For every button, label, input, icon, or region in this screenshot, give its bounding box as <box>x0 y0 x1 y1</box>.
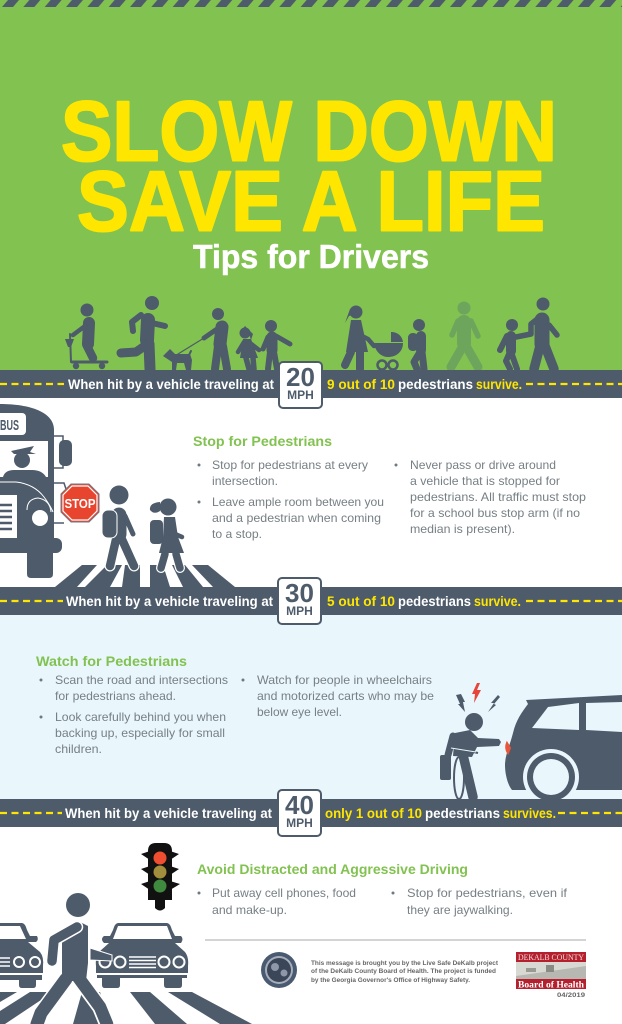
figure: dog walker with dog <box>163 308 227 370</box>
figure: woman with stroller <box>345 306 403 370</box>
logo: county seal <box>261 952 297 988</box>
left bullets: Stop for pedestrians at every <box>212 458 368 472</box>
icon: right car <box>96 923 188 988</box>
road band: 30 mph: survive. <box>474 594 521 609</box>
right bullets: Stop for pedestrians, even if <box>407 886 568 900</box>
heading: Watch for Pedestrians <box>36 653 187 669</box>
icon: alert bolts <box>456 683 500 712</box>
grille <box>0 495 17 538</box>
sponsor text: of the DeKalb County Board of Health. The project is funded <box>311 968 496 975</box>
speed sign 20: MPH <box>287 388 314 402</box>
right bullets: pedestrians. All traffic must stop <box>410 490 586 504</box>
icon: girl with backpack <box>150 498 184 568</box>
right bullets <box>392 886 568 917</box>
figure: boy <box>263 320 290 369</box>
left bullets: for pedestrians ahead. <box>55 689 176 703</box>
left bullets: Scan the road and intersections <box>55 673 228 687</box>
cyclist <box>440 713 501 799</box>
left bullets <box>198 886 356 917</box>
right bullets: for a school bus stop arm (if no <box>410 506 580 520</box>
left bullets: to a stop. <box>212 527 262 541</box>
panel: stop for pedestrians <box>193 433 586 541</box>
title: SLOW DOWN <box>61 84 557 180</box>
icon: left car <box>0 923 43 988</box>
road band: 40 mph: survives. <box>503 806 556 821</box>
left bullets: Put away cell phones, food <box>212 886 356 900</box>
figure: child with backpack <box>408 319 425 369</box>
right bullets <box>394 458 586 536</box>
hood curve <box>0 482 53 512</box>
road band: 40 mph: When hit by a vehicle traveling at <box>65 806 272 821</box>
road band: 20 mph: pedestrians <box>398 377 473 392</box>
speed sign 40 <box>278 790 321 836</box>
figure: adult holding child's hand <box>500 298 557 369</box>
road band: 20 mph: When hit by a vehicle traveling at <box>68 377 274 392</box>
speed sign 40: MPH <box>286 816 313 830</box>
panel: watch for pedestrians <box>0 615 622 805</box>
right bullets: Never pass or drive around <box>410 458 556 472</box>
road band: 40 mph: only 1 out of 10 <box>325 806 422 821</box>
logo: board of health: DEKALB COUNTY <box>518 953 584 962</box>
icon: school bus with stop arm <box>0 404 99 578</box>
right bullets: they are jaywalking. <box>407 903 513 917</box>
heading: Avoid Distracted and Aggressive Driving <box>197 861 468 877</box>
speed sign 30 <box>278 578 321 624</box>
icon: boy with backpack <box>102 486 134 566</box>
road band: 20 mph: survive. <box>476 377 522 392</box>
road band: 30 mph: pedestrians <box>398 594 471 609</box>
right bullets <box>242 673 434 719</box>
icon: crosswalk under children <box>55 565 235 587</box>
left bullets <box>198 458 384 541</box>
hazard stripe <box>0 0 622 7</box>
road band: 20 mph <box>0 362 622 408</box>
logo: board of health <box>516 952 586 990</box>
figure: scooter rider <box>65 304 107 369</box>
sponsor text <box>311 960 499 984</box>
figure: faded walker <box>451 302 478 367</box>
right bullets: median is present). <box>410 522 515 536</box>
left bullets: backing up, especially for small <box>55 726 225 740</box>
figure: girl <box>238 326 259 369</box>
date: 04/2019 <box>557 992 585 999</box>
icon: school bus with stop arm: BUS <box>0 417 19 434</box>
sponsor text: This message is brought you by the Live Safe DeKalb project <box>311 960 499 967</box>
road band: 30 mph <box>0 587 622 615</box>
title <box>61 84 557 250</box>
subtitle: Tips for Drivers <box>193 238 429 275</box>
icon: pedestrian on phone <box>37 893 112 1024</box>
speed sign 20 <box>279 362 322 408</box>
heading: Stop for Pedestrians <box>193 433 332 449</box>
icon: crosswalk bottom <box>0 992 252 1024</box>
left bullets: Leave ample room between you <box>212 495 384 509</box>
left bullets: Look carefully behind you when <box>55 710 226 724</box>
right bullets: Watch for people in wheelchairs <box>257 673 432 687</box>
left bullets: and make-up. <box>212 903 287 917</box>
icon: pedestrians walking row <box>65 296 557 370</box>
sponsor text: by the Georgia Governor's Office of Highway Safety. <box>311 977 470 984</box>
left bullets: intersection. <box>212 474 278 488</box>
bus sign <box>0 413 26 435</box>
speed sign 30: MPH <box>286 604 313 618</box>
road band: 40 mph: pedestrians <box>425 806 500 821</box>
right bullets: a vehicle that is stopped for <box>410 474 560 488</box>
road band: 30 mph: 5 out of 10 <box>327 594 395 609</box>
left bullets: and a pedestrian when coming <box>212 511 381 525</box>
road band: 30 mph: When hit by a vehicle traveling at <box>66 594 273 609</box>
icon: cyclist and car <box>440 683 622 805</box>
logo: board of health: Board of Health <box>518 980 585 990</box>
stop sign: STOP <box>64 497 96 511</box>
left bullets <box>40 673 228 756</box>
figure: runner <box>121 296 165 369</box>
footer <box>261 952 586 999</box>
title: SAVE A LIFE <box>77 154 545 250</box>
right bullets: and motorized carts who may be <box>257 689 434 703</box>
road band: 20 mph: 9 out of 10 <box>327 377 395 392</box>
left bullets: children. <box>55 742 102 756</box>
mirror <box>54 436 63 468</box>
panel: avoid distracted driving <box>197 861 568 917</box>
icon: traffic light <box>141 843 180 910</box>
speed sign 20: 20 <box>286 362 315 392</box>
stop sign <box>61 484 99 522</box>
speed sign 40: 40 <box>285 790 314 820</box>
car <box>505 695 622 805</box>
windshield and driver <box>0 441 48 477</box>
road band: 40 mph <box>0 790 622 836</box>
speed sign 30: 30 <box>285 578 314 608</box>
right bullets: below eye level. <box>257 705 342 719</box>
panel: green header <box>0 0 622 370</box>
